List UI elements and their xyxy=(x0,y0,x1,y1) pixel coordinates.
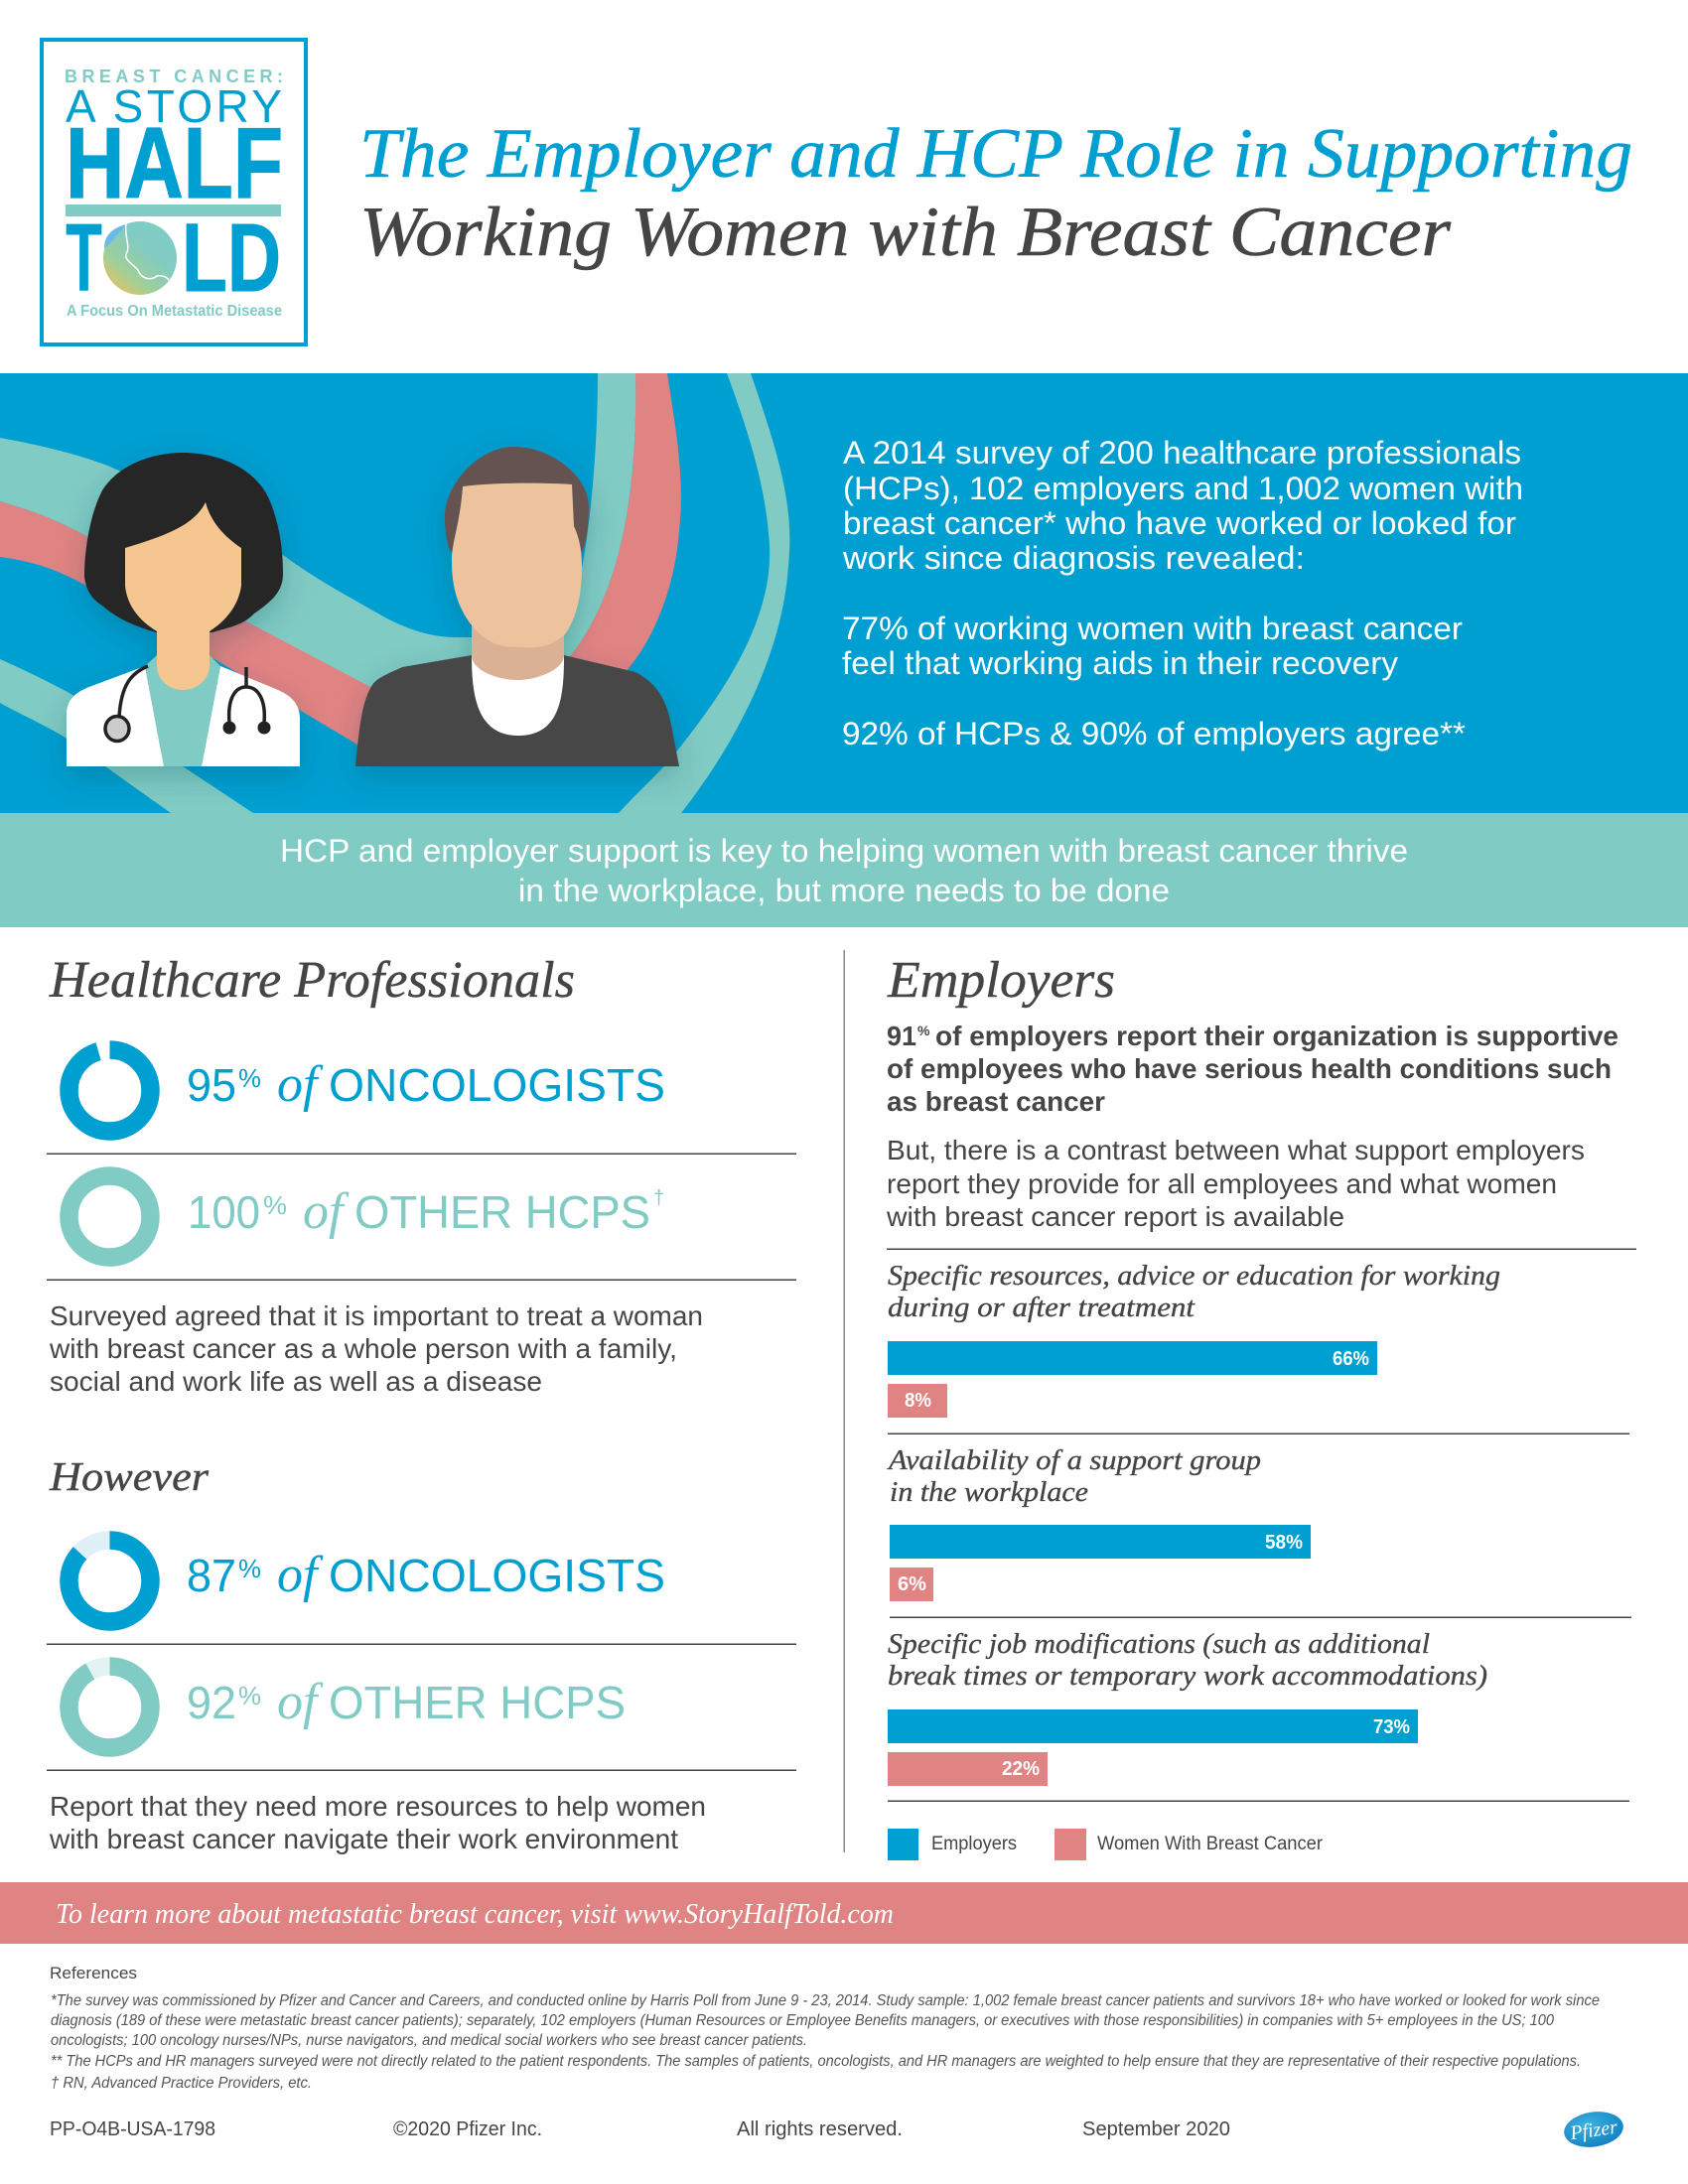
text block: need more resources: with breast cancer navigate their work environment xyxy=(49,1824,678,1854)
donut: 95% of oncologists: of xyxy=(277,1056,324,1113)
chart: job modifications: 22% xyxy=(1002,1758,1040,1780)
references: *The survey was commissioned by Pfizer and Cancer and Careers, and conducted online by Harris Poll from June 9 - 23, 2014. Study sample: 1,002 female breast cancer patients and survivors 18+ who have worked or looked for work since xyxy=(51,1992,1600,2009)
donut: 95% of oncologists: ONCOLOGISTS xyxy=(329,1059,665,1111)
text block: contrast: with breast cancer report is available xyxy=(886,1201,1344,1232)
logo: Breast Cancer: A Story Half Told: A Focus On Metastatic Disease xyxy=(67,303,282,320)
logo: Breast Cancer: A Story Half Told xyxy=(42,40,306,344)
banner: learn more: To learn more about metastatic breast cancer, visit www.StoryHalfTold.com xyxy=(56,1899,894,1930)
logo: Breast Cancer: A Story Half Told: LD xyxy=(182,204,281,312)
text block: survey intro: (HCPs), 102 employers and 1,002 women with xyxy=(843,471,1523,506)
title: The Employer and HCP Role in Supporting xyxy=(359,115,1632,193)
text block: surveyed agreed: social and work life as well as a disease xyxy=(50,1366,542,1397)
donut: 95% of oncologists: % xyxy=(238,1063,261,1093)
text block: contrast: report they provide for all employees and what women xyxy=(887,1168,1557,1199)
panel: hero banner xyxy=(0,373,1688,813)
text block: need more resources: Report that they need more resources to help women xyxy=(50,1791,706,1822)
donut: 100% of other HCPs: † xyxy=(653,1187,664,1209)
footer xyxy=(50,2118,1230,2140)
donut: 87% of oncologists: of xyxy=(277,1547,324,1603)
donut: 100% of other HCPs: 100 xyxy=(188,1186,260,1238)
text block: contrast xyxy=(886,1135,1585,1232)
text block: 91% of employers xyxy=(887,1021,1618,1117)
donut: 100% of other HCPs: of xyxy=(303,1183,350,1240)
footer: PP-O4B-USA-1798 xyxy=(50,2118,215,2140)
chart: job modifications: 73% xyxy=(1373,1716,1410,1738)
chart: support group: 6% xyxy=(898,1573,926,1595)
chart: job modifications: break times or temporary work accommodations) xyxy=(888,1661,1487,1692)
references: References xyxy=(50,1964,137,1982)
logo: Breast Cancer: A Story Half Told: T xyxy=(66,204,102,312)
references: oncologists; 100 oncology nurses/NPs, nurse navigators, and medical social workers who see breast cancer patients. xyxy=(51,2032,807,2049)
logo: Pfizer xyxy=(1562,2108,1625,2151)
text block: survey intro xyxy=(842,435,1523,751)
donut: 95% of oncologists xyxy=(70,1050,665,1132)
donut: 87% of oncologists: 87 xyxy=(187,1550,236,1601)
text block: 91% of employers: of employees who have serious health conditions such xyxy=(887,1053,1612,1084)
chart: specific resources: Specific resources, advice or education for working xyxy=(888,1261,1500,1292)
footer: All rights reserved. xyxy=(737,2118,903,2140)
donut: 87% of oncologists: % xyxy=(238,1554,261,1583)
donut: 95% of oncologists: 95 xyxy=(187,1059,236,1111)
chart: job modifications: Specific job modifications (such as additional xyxy=(888,1629,1430,1660)
chart: specific resources xyxy=(888,1261,1500,1418)
donut: 100% of other HCPs: OTHER HCPS xyxy=(354,1186,650,1238)
donut: 87% of oncologists: ONCOLOGISTS xyxy=(329,1550,665,1601)
text block: survey intro: breast cancer* who have worked or looked for xyxy=(843,505,1516,541)
text block: need more resources xyxy=(49,1791,706,1854)
references: diagnosis (189 of these were metastatic breast cancer patients); separately, 102 employers (Human Resources or Employee Benefits managers, or executives with those responsibilities) in companies with 5+ employees in the US; 100 xyxy=(51,2012,1554,2029)
text block: survey intro: work since diagnosis revealed: xyxy=(842,540,1305,576)
text block: 91% of employers: 91 xyxy=(887,1021,916,1051)
logo: Breast Cancer: A Story Half Told: BREAST CANCER: xyxy=(65,67,283,86)
donut: 87% of oncologists xyxy=(70,1541,665,1622)
banner: key message: HCP and employer support is key to helping women with breast cancer thrive xyxy=(280,833,1408,869)
references: ** The HCPs and HR managers surveyed were not directly related to the patient respondents. The samples of patients, oncologists, and HR managers are weighted to help ensure that they are representative of their respective populations. xyxy=(51,2053,1581,2070)
heading: healthcare professionals: Healthcare Professionals xyxy=(49,952,575,1009)
chart: specific resources: 66% xyxy=(1333,1348,1369,1370)
text block: 91% of employers: as breast cancer xyxy=(887,1086,1105,1117)
banner: key message xyxy=(0,813,1688,927)
legend: Women With Breast Cancer xyxy=(1097,1834,1324,1854)
text block: survey intro: A 2014 survey of 200 healthcare professionals xyxy=(843,435,1521,471)
logo: Breast Cancer: A Story Half Told: A STORY xyxy=(66,80,282,132)
banner: learn more xyxy=(0,1882,1688,1944)
text block: survey intro: 77% of working women with breast cancer xyxy=(842,611,1463,646)
footer: September 2020 xyxy=(1082,2118,1230,2140)
logo: Pfizer: Pfizer xyxy=(1568,2116,1619,2144)
chart: specific resources: 8% xyxy=(905,1390,931,1412)
donut: 92% of other HCPs: 92 xyxy=(187,1677,236,1728)
legend xyxy=(888,1829,1324,1860)
references: † RN, Advanced Practice Providers, etc. xyxy=(51,2075,312,2092)
chart: specific resources: during or after treatment xyxy=(888,1293,1196,1323)
chart: support group: in the workplace xyxy=(890,1477,1088,1508)
chart: support group: 58% xyxy=(1265,1532,1303,1554)
donut: 92% of other HCPs: OTHER HCPS xyxy=(329,1677,626,1728)
panel: healthcare professionals xyxy=(47,952,796,1854)
heading: however: However xyxy=(49,1453,210,1499)
donut: 100% of other HCPs xyxy=(70,1175,664,1257)
title: Working Women with Breast Cancer xyxy=(359,194,1451,271)
text block: surveyed agreed xyxy=(49,1300,703,1397)
text block: surveyed agreed: with breast cancer as a whole person with a family, xyxy=(49,1333,677,1364)
chart: support group xyxy=(887,1445,1311,1601)
illustration: woman doctor xyxy=(67,453,300,766)
donut: 100% of other HCPs: % xyxy=(263,1190,287,1220)
heading: employers: Employers xyxy=(887,952,1115,1009)
text block: surveyed agreed: Surveyed agreed that it is important to treat a woman xyxy=(50,1300,703,1331)
illustration: male employer xyxy=(355,447,679,766)
donut: 92% of other HCPs xyxy=(70,1666,626,1747)
banner: key message: in the workplace, but more needs to be done xyxy=(518,873,1170,908)
references xyxy=(50,1964,1600,2092)
text block: 91% of employers: % xyxy=(917,1023,930,1038)
text block: survey intro: 92% of HCPs & 90% of employers agree** xyxy=(842,716,1466,751)
title xyxy=(359,115,1632,271)
chart: support group: Availability of a support group xyxy=(887,1445,1261,1476)
donut: 92% of other HCPs: % xyxy=(238,1681,261,1710)
text block: 91% of employers: of employers report their organization is supportive xyxy=(935,1021,1618,1051)
panel: employers xyxy=(886,952,1636,1860)
text block: survey intro: feel that working aids in their recovery xyxy=(842,645,1398,681)
text block: contrast: But, there is a contrast between what support employers xyxy=(887,1135,1585,1165)
donut: 92% of other HCPs: of xyxy=(277,1674,324,1730)
logo: Breast Cancer: A Story Half Told: HALF xyxy=(66,108,283,219)
legend: Employers xyxy=(931,1834,1017,1854)
chart: job modifications xyxy=(888,1629,1487,1786)
footer: ©2020 Pfizer Inc. xyxy=(393,2118,542,2140)
